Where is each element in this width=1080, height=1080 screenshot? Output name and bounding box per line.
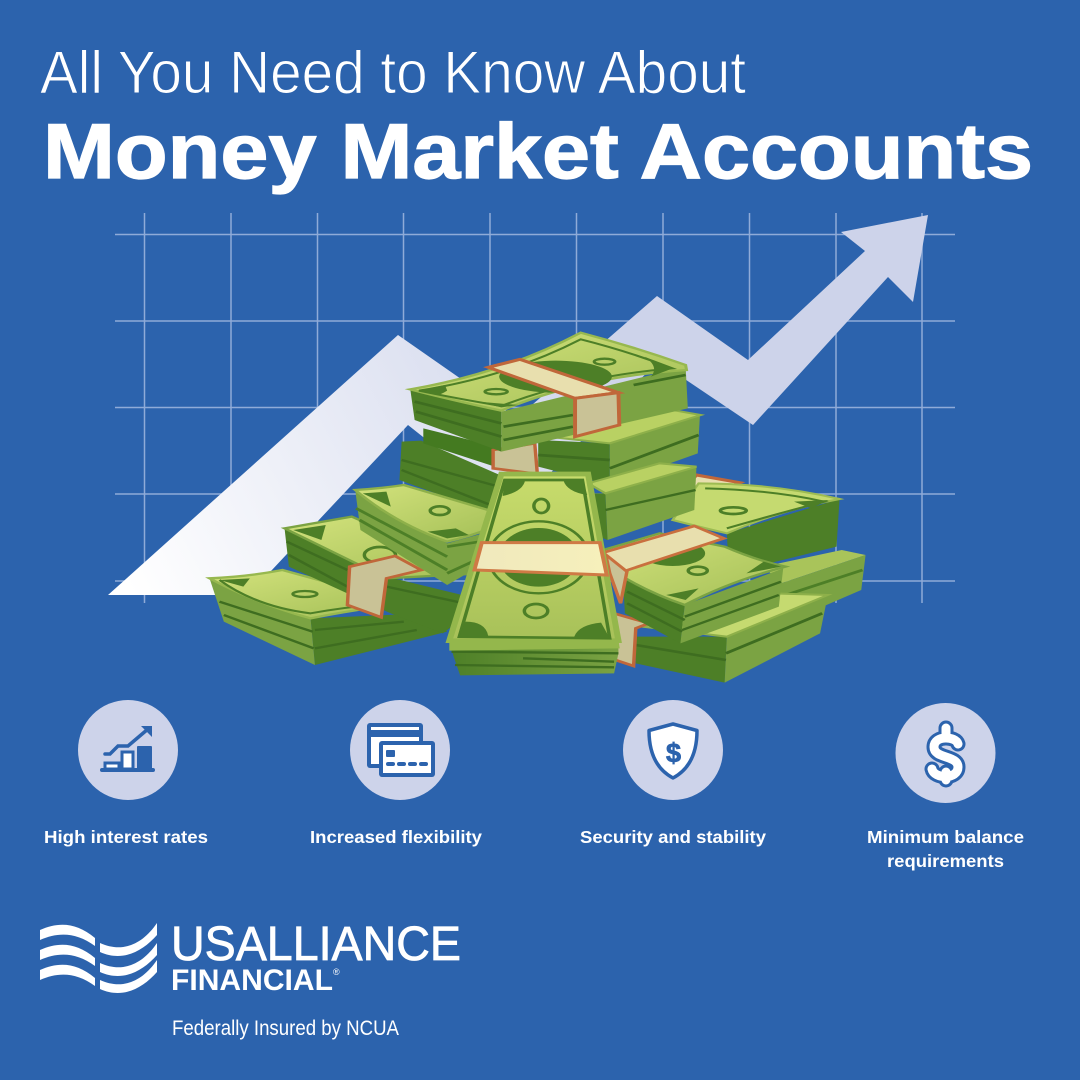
icon: waves [40,923,157,993]
stack: lower middle band [614,613,649,666]
icon: growth chart [78,700,178,800]
feature: security and stability [580,700,766,847]
stack: left middle [285,517,482,633]
label: High interest rates [44,827,208,847]
stack: third tier [399,441,696,540]
paper band: back right [686,475,740,503]
insurance statement: Federally Insured by NCUA [172,1017,399,1040]
icon: cards [350,700,450,800]
stack: right front [603,526,785,643]
label: Increased flexibility [310,827,482,847]
label: requirements [887,851,1004,871]
icon: shield dollar: $ [666,738,681,768]
wordmark: USALLIANCE [171,918,461,971]
under stack shadow and band [423,428,537,474]
feature: high interest rates [44,700,208,847]
chart arrow rising [108,215,928,595]
stack: front centre bill [449,474,620,675]
stack: left lower [210,570,447,665]
icon: shield [623,700,723,800]
stack: lower right [636,593,828,683]
USAlliance Financial logo [40,918,461,997]
title: line one: All You Need to Know About [40,39,746,106]
stack: right large [673,483,840,573]
stack: top [410,333,688,452]
label [867,827,1024,871]
feature: increased flexibility [310,700,482,847]
registered mark: ® [333,967,340,977]
title: line two: Money Market Accounts [43,107,1033,195]
wordmark subtitle: FINANCIAL [171,964,333,997]
stack: far right [764,550,866,613]
stack: second tier right [538,410,701,485]
paper band: left [347,556,421,617]
money pile illustration [210,333,866,683]
stack: mid left [355,485,499,585]
label: Minimum balance [867,827,1024,847]
feature: minimum balance requirements [867,703,1024,871]
icon: dollar sign [896,703,996,803]
label: Security and stability [580,827,766,847]
